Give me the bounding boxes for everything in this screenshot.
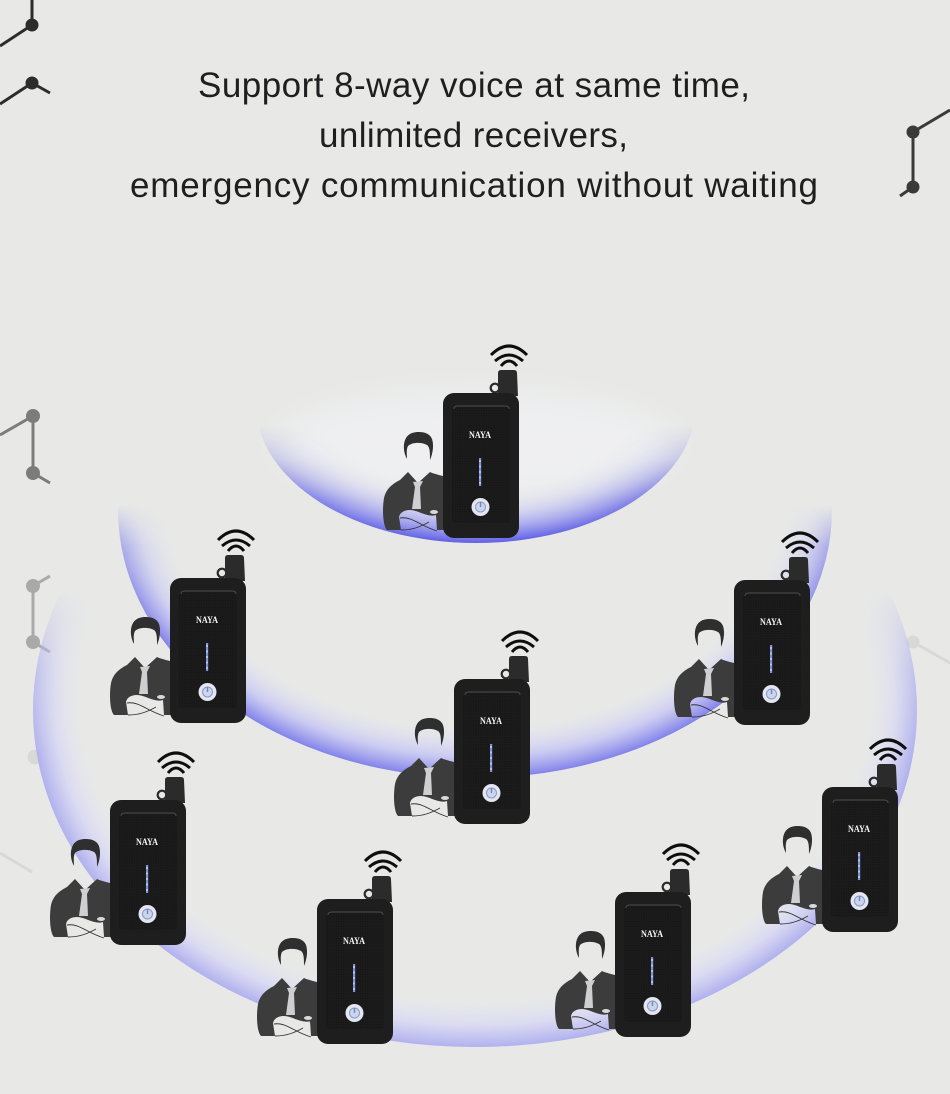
signal ring: top: [261, 434, 691, 543]
unit 7: bottom right person with radio: [555, 845, 699, 1037]
unit 5: lower left person with radio: [50, 753, 194, 945]
unit 4: centre person with radio: NAYA: [480, 716, 502, 726]
unit 8: lower right person with radio: [762, 740, 906, 932]
unit 1: top person with radio: [383, 346, 527, 538]
unit 1: top person with radio: NAYA: [469, 430, 491, 440]
unit 4: centre person with radio: [394, 632, 538, 824]
unit 6: bottom left person with radio: [257, 852, 401, 1044]
unit 8: lower right person with radio: NAYA: [848, 824, 870, 834]
network decoration: top left: [0, 0, 50, 104]
signal ring: middle: [118, 510, 832, 775]
title: unlimited receivers,: [319, 116, 628, 155]
unit 2: upper left person with radio: [110, 531, 254, 723]
title: [130, 66, 818, 205]
title: emergency communication without waiting: [130, 166, 818, 205]
soft glow: top ring interior: [281, 395, 671, 495]
unit 5: lower left person with radio: NAYA: [136, 837, 158, 847]
unit 6: bottom left person with radio: NAYA: [343, 936, 365, 946]
network decoration: faded marks: [0, 636, 950, 872]
unit 7: bottom right person with radio: NAYA: [641, 929, 663, 939]
network decoration: middle left: [0, 410, 50, 483]
signal ring: outer: [33, 608, 917, 1047]
title: Support 8-way voice at same time,: [198, 66, 750, 105]
network decoration: top right: [900, 110, 950, 196]
network decoration: lower left: [26, 576, 50, 652]
unit 2: upper left person with radio: NAYA: [196, 615, 218, 625]
unit 3: upper right person with radio: NAYA: [760, 617, 782, 627]
unit 3: upper right person with radio: [674, 533, 818, 725]
